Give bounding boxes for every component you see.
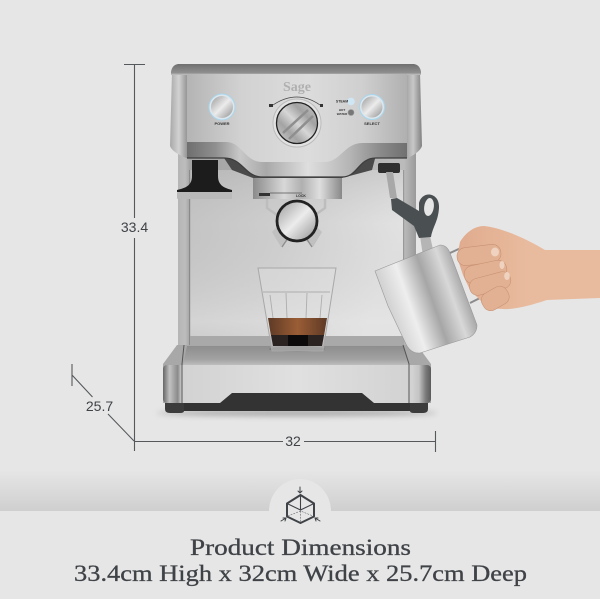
wand grip [391, 194, 439, 238]
power button [209, 94, 235, 126]
footer gradient band [0, 470, 600, 511]
hot water indicator: HOT [339, 108, 345, 112]
finger nails [491, 248, 510, 280]
front control panel [187, 74, 407, 162]
hand holding jug [375, 226, 600, 353]
machine head [170, 64, 422, 177]
machine body column [178, 150, 416, 350]
icon: dimensions cube [281, 487, 320, 523]
steam indicator [336, 98, 355, 105]
espresso machine [157, 64, 439, 416]
select button: SELECT [364, 121, 380, 126]
milk jug handle [450, 247, 482, 303]
portafilter [267, 199, 325, 247]
dimension: height: 33.4 [121, 219, 148, 235]
power button: POWER [214, 121, 230, 126]
steam indicator: STEAM [336, 100, 348, 104]
hot water indicator: WATER [337, 112, 348, 116]
machine base [163, 345, 431, 413]
group head [253, 178, 342, 199]
floor shadow [157, 410, 437, 416]
glass of espresso [258, 268, 336, 352]
fingers [456, 243, 513, 314]
milk jug [375, 245, 477, 353]
dimension: height [121, 64, 148, 451]
dimension: width: 32 [285, 433, 301, 449]
dimension: depth: 25.7 [86, 398, 113, 414]
select button [360, 94, 384, 126]
hand and arm [456, 226, 600, 314]
footer icon badge [269, 479, 331, 523]
footer dimensions text: 33.4cm High x 32cm Wide x 25.7cm Deep [74, 561, 527, 586]
hot water indicator [337, 108, 354, 116]
selector dial [269, 97, 323, 147]
footer heading: Product Dimensions [190, 535, 411, 560]
group head: LOCK [296, 194, 306, 198]
tamper [177, 160, 232, 199]
top cap [171, 64, 421, 75]
Sage logo: Sage [283, 80, 311, 95]
drip tray [183, 346, 410, 365]
steam wand [378, 163, 439, 256]
shadow under head [222, 155, 376, 178]
lower curved band [187, 140, 407, 177]
dimension: width [134, 431, 436, 452]
dimension: depth [72, 364, 134, 441]
